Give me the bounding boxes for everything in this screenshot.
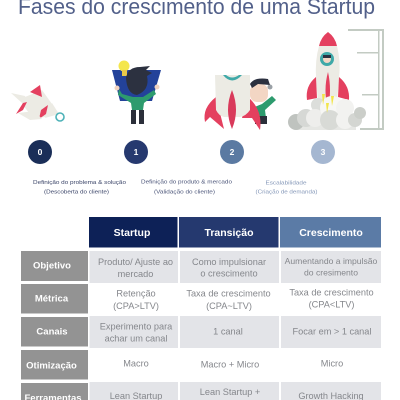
row: Otimização [21,350,343,380]
row: Otimização: Macro [123,358,149,368]
row: Métrica: (CPA~LTV) [206,301,252,311]
row: Métrica: (CPA>LTV) [113,301,159,311]
row: Canais: 1 canal [213,326,243,336]
row: Canais: achar um canal [105,334,167,344]
row: Canais [21,316,381,348]
step 0 caption: (Descoberta do cliente) [44,190,109,196]
step 1 caption: (Validação do cliente) [154,190,215,196]
step 0 circle [28,140,52,164]
table header: Transição: Transição [204,227,254,239]
row: Otimização: Otimização [26,360,77,372]
step 0 caption [33,180,126,196]
icon: height ruler [348,29,384,130]
step 3 circle: 3 [321,147,326,157]
row: Objetivo: mercado [118,269,153,279]
step 0 circle: 0 [38,147,43,157]
row: Métrica: Métrica [35,294,69,304]
row: Objetivo: Produto/ Ajuste ao [98,257,173,267]
icon: crashed rocket [11,85,64,121]
step 0 caption: Definição do problema & solução [33,180,126,186]
table header: Crescimento: Crescimento [299,227,363,239]
step 2 caption [256,180,318,196]
row: Ferramentas: Lean Startup + [200,387,260,397]
step 2 caption: (Criação de demanda) [256,190,318,196]
row: Métrica: Retenção [116,288,156,298]
row: Objetivo: Aumentando a impulsão [285,256,378,266]
table header: Transição [179,217,278,248]
row: Objetivo: Como impulsionar [192,257,266,267]
row: Objetivo: o crescimento [200,268,258,278]
row: Objetivo: Objetivo [33,260,71,272]
row: Ferramentas [21,382,381,400]
step 1 caption [141,180,232,196]
icon: rocket launching [288,32,366,130]
row: Otimização: Micro [321,358,343,368]
step 2 caption: Escalabilidade [266,180,307,186]
row: Objetivo: do cresimento [304,268,358,278]
row: Canais: Experimento para [100,322,173,332]
table header: Startup [89,217,178,248]
table header: Crescimento [280,217,381,248]
step 2 circle: 2 [230,147,235,157]
step 1 circle: 1 [134,147,139,157]
row: Métrica [21,284,374,314]
step 1 caption: Definição do produto & mercado [141,180,232,186]
icon: rocket with thinking man [204,75,276,130]
row: Métrica: Taxa de crescimento [186,288,271,298]
row: Canais: Focar em > 1 canal [293,326,371,336]
row: Otimização: Macro + Micro [201,360,259,370]
step 3 circle [311,140,335,164]
icon: person with blueprint and light bulb [112,60,161,124]
table header: Startup: Startup [114,227,150,239]
row: Métrica: Taxa de crescimento [289,288,374,298]
step 1 circle [124,140,148,164]
row: Objetivo [21,251,381,283]
row: Canais: Canais [36,326,68,338]
step 2 circle [220,140,244,164]
row: Métrica: (CPA<LTV) [309,300,354,310]
